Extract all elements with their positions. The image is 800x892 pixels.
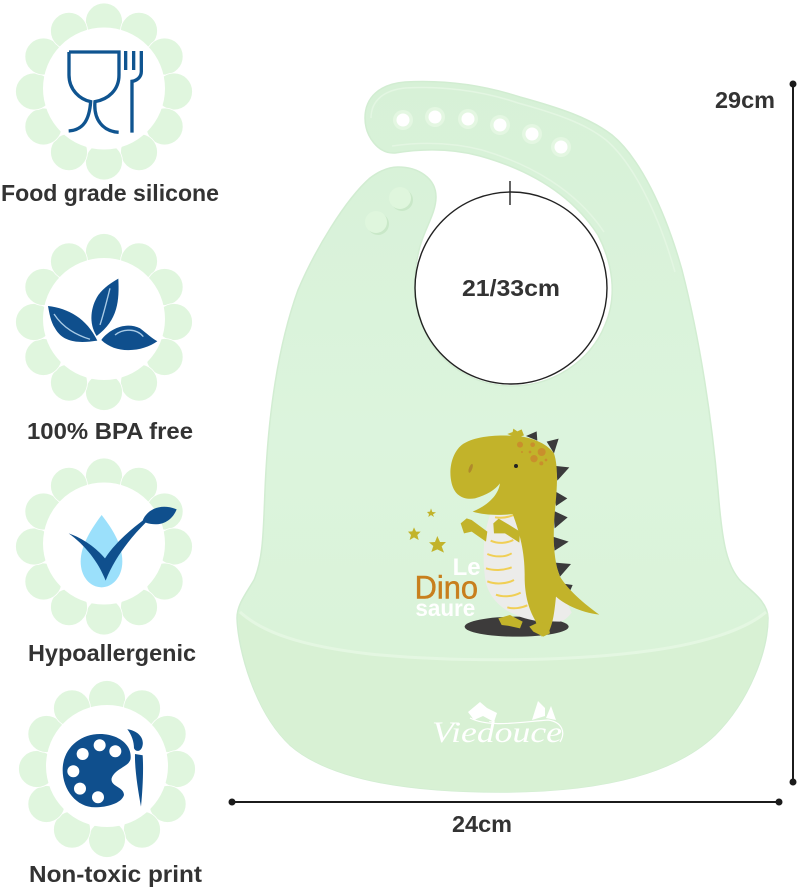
icon: flower badge with glass and fork xyxy=(16,3,193,180)
icon: flower badge with leaves xyxy=(16,234,193,410)
pocket rim xyxy=(240,612,766,660)
arms xyxy=(461,518,520,543)
eye xyxy=(514,464,518,468)
logo: Viedouce xyxy=(432,701,563,749)
width dimension xyxy=(228,798,782,837)
height label: 29cm xyxy=(715,87,775,113)
panel: BPA free xyxy=(16,234,193,444)
icon: flower badge with drop and check xyxy=(16,458,193,635)
panel: silicone bib xyxy=(237,82,768,792)
height dimension xyxy=(715,80,796,786)
spikes xyxy=(526,431,581,607)
neck measurement label: 21/33cm xyxy=(462,275,560,301)
panel: hypoallergenic xyxy=(16,458,196,666)
nostril xyxy=(467,463,474,473)
belly stripes xyxy=(486,515,527,608)
strap holes xyxy=(393,107,571,157)
label: Non-toxic print xyxy=(29,861,202,887)
brand wordmark saure: saure xyxy=(415,595,475,621)
label: Food grade silicone xyxy=(1,180,219,206)
width label: 24cm xyxy=(452,811,512,837)
neck measurement circle xyxy=(415,181,607,384)
label: 100% BPA free xyxy=(27,418,193,444)
belly xyxy=(484,515,572,622)
icon: flower badge with palette and brush xyxy=(18,680,196,858)
panel: non-toxic print xyxy=(18,680,202,887)
stars xyxy=(408,508,446,553)
body and head xyxy=(450,436,599,637)
feet xyxy=(498,615,550,637)
head crest xyxy=(507,429,524,438)
panel: food grade silicone xyxy=(1,3,219,206)
dinosaur print xyxy=(408,429,599,637)
brand wordmark Le: Le xyxy=(453,554,481,581)
bib body xyxy=(237,82,768,792)
freckles xyxy=(517,442,547,465)
snap buttons xyxy=(365,187,413,235)
label: Hypoallergenic xyxy=(28,640,196,666)
logo: Viedouce: Viedouce xyxy=(432,716,562,749)
brand wordmark Dino: Dino xyxy=(415,569,478,605)
pocket xyxy=(238,612,768,792)
ground shadow xyxy=(465,617,569,637)
strap inner rim xyxy=(371,88,675,272)
